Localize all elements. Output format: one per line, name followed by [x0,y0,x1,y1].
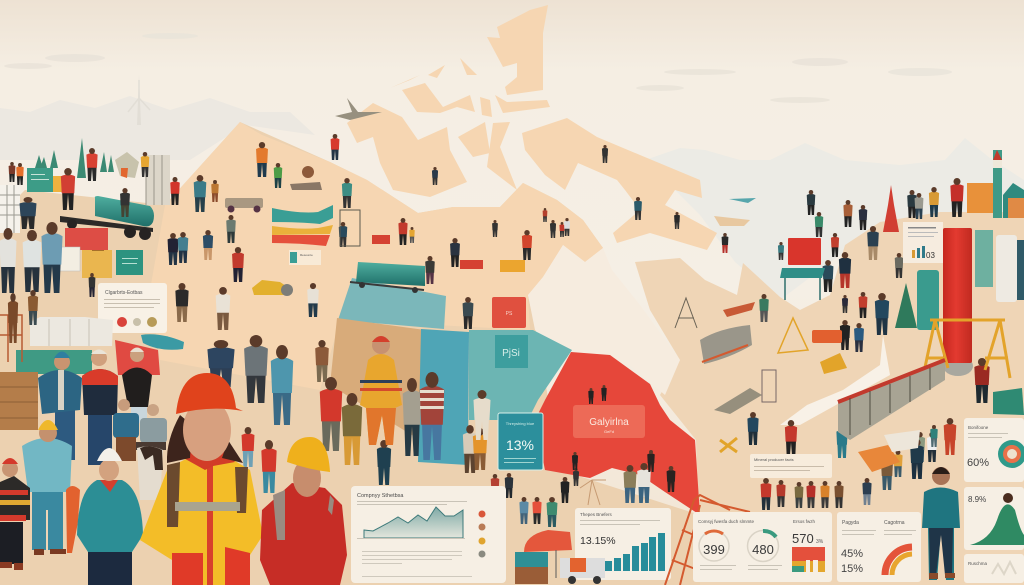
pine trees [35,138,114,178]
river white strip [780,335,890,425]
teal statistic card 13%: Threyshing blue [506,421,535,426]
man with yellow hard hat [260,437,347,585]
panel: regional note: Mineral producer facts [754,457,794,462]
east side people [747,178,990,510]
map crowd center [207,335,675,527]
panel: gauges 399 480 570: 480 [752,542,774,557]
back row workers, left [38,348,167,500]
small map label [289,250,321,265]
panel: gauge rainbow [837,512,921,582]
panel: gauges 399 480 570: Comsyj fwesfa duch slmmte [698,519,755,524]
tent easel [580,480,606,505]
silver tanks and machinery east [675,198,1024,472]
teal statistic card 13% [498,413,543,470]
window frame left edge [0,185,20,233]
map: red region Ontario [535,352,700,515]
red cylinder tank [943,228,973,376]
ribbon bar graphic [272,205,333,246]
fenced structure [838,360,945,440]
cabin [115,152,139,178]
man in teal jacket [922,467,960,580]
panel: gauges 399 480 570: 570 [792,531,814,546]
panel: 60% donut: Bonifoone [968,425,989,430]
market stall and red sign [780,238,825,300]
panel: percentage bars: Thepes Bnefers [580,512,613,517]
green tank on map [350,262,425,293]
map: brown region [330,318,425,440]
panel: gauge rainbow: 15% [841,563,863,575]
signs left cluster [60,228,143,278]
map: arctic islands [347,5,717,250]
panel: regional note [750,454,832,478]
white blocks and containers left [16,317,184,375]
teal info card: PjSi [502,348,520,359]
lower land base, left [0,122,700,585]
aeroplane [335,98,382,120]
white tower frame [146,155,170,205]
hudson bay [528,245,680,395]
panel: green figure chart: 8.9% [968,495,986,504]
panel: area chart [351,486,506,583]
distant mountains, right [645,138,1024,300]
wooden crate left [0,372,38,430]
panel: area chart: Compnyy Sthetbsa [357,493,404,499]
panel: gauge rainbow: Pagyda [842,520,859,526]
panel: percentage bars: 13.15% [580,535,616,547]
map: teal region north [338,278,446,329]
panel: 60% donut: 60% [967,457,989,469]
teal and white tanks [917,150,1024,330]
red lattice crane [665,495,750,585]
panel: green figure chart [964,487,1024,550]
info panel left [98,283,167,333]
panel: gauge rainbow: Cagotrna [884,520,905,526]
teal info card [495,335,528,368]
hard hat worker centre [360,336,402,445]
red info card [492,297,526,328]
label: red region [573,405,645,438]
child: white hat teal jacket [77,448,143,585]
tanker truck [60,196,154,240]
map: pale teal region [469,330,572,420]
info tag and bar mini [903,222,943,263]
small map label: Resource [300,253,313,257]
teal sign top left [27,168,63,192]
main woman with orange hard hat [140,373,263,585]
map: teal region tall [418,329,469,465]
info tag and bar mini: 03 [926,251,935,260]
worker: blue sweater yellow hat [22,420,72,555]
panel: gauges 399 480 570: Ersos fwzh [793,519,816,524]
truck and container [515,530,605,584]
panel: gauge rainbow: 45% [841,548,863,560]
yellow gantry [924,320,1010,378]
left crowd [0,197,95,343]
scaffold left [0,315,22,362]
info panel left: Clgarbrts-Eotbas [105,290,143,296]
panel: gauges 399 480 570 [693,512,832,582]
people scattered across western map [9,134,728,330]
panel: bottom right: Ruschma [968,561,988,566]
vehicles on western map [225,166,525,296]
clouds [4,33,952,103]
pine tree east [895,283,917,328]
panel: percentage bars [575,508,671,580]
map: eastern land [635,212,1024,585]
teal statistic card 13%: 13% [506,437,534,453]
red info card: PS [506,311,513,317]
panel: gauges 399 480 570: 3% [816,539,824,545]
panel: 60% donut [964,418,1024,482]
red water tower [883,185,899,232]
distant mountains and wind turbine, left [0,75,315,160]
map: western territories [150,122,603,390]
panel: bottom right [964,554,1024,583]
label: red region: Galyirlna [589,417,629,428]
panel: gauges 399 480 570: 399 [703,542,725,557]
child: orange coat [66,486,80,553]
label: red region: GeFd [604,429,614,434]
child: red hat stripes [0,458,30,570]
